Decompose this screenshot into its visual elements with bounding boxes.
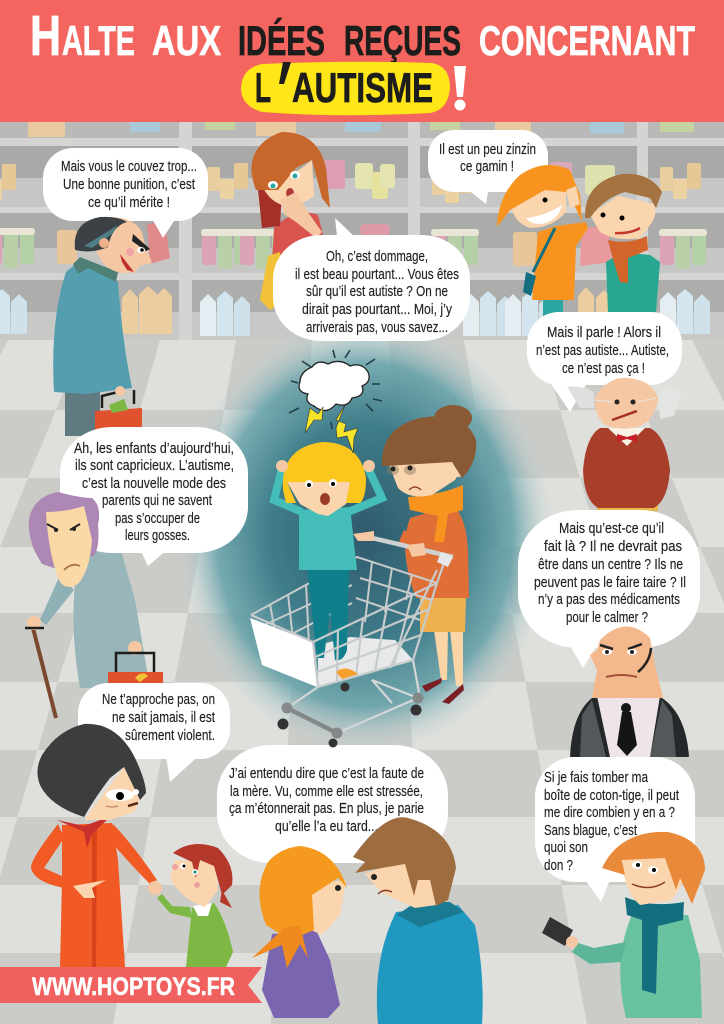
character: angry woman with black hair [31, 724, 233, 967]
shopping basket [95, 386, 142, 430]
speech bubble: pas médicaments: fait là ? Il ne devrait pas [544, 538, 682, 555]
speech bubble: zinzin [428, 130, 548, 204]
character: orange-haired woman from behind [252, 846, 347, 1018]
speech bubble: c'est dommage: il est beau pourtant... Vous êtes [295, 266, 459, 283]
speech bubble: coton-tige: don ? [544, 857, 573, 874]
character: smiling boy with phone [542, 832, 705, 1018]
exclamation mark [454, 66, 466, 110]
speech bubble: il parle: Mais il parle ! Alors il [547, 324, 661, 341]
character: laughing orange-haired boy [497, 165, 588, 316]
speech bubble: zinzin: ce gamin ! [460, 158, 514, 175]
speech bubble: c'est dommage: Oh, c’est dommage, [326, 248, 428, 265]
old lady's head [29, 492, 99, 587]
speech bubble: sûrement violent: sûrement violent. [125, 727, 215, 744]
speech bubble: c'est dommage: sûr qu’il est autiste ? On ne [306, 283, 448, 300]
speech bubble: faute de la mère: qu’elle l’a eu tard... [275, 818, 378, 835]
highlighted word: l'autisme: AUTISME [292, 64, 433, 111]
mother [382, 405, 476, 704]
speech bubble: coton-tige: boîte de coton-tige, il peut [544, 787, 680, 804]
speech bubble: enfants capricieux: ils sont capricieux. L’autisme, [75, 457, 234, 474]
speech bubble: enfants capricieux [60, 427, 248, 566]
title banner [0, 0, 724, 122]
thought cloud with lightning [289, 350, 382, 453]
speech bubble: enfants capricieux: c’est la nouvelle mode des [82, 475, 226, 492]
speech bubble: coton-tige [535, 757, 695, 902]
speech bubble: coton-tige: me dire combien y en a ? [544, 804, 675, 821]
speech bubble: pas médicaments: pour le calmer ? [566, 609, 648, 626]
speech bubble: pas médicaments: être dans un centre ? Ils ne [538, 556, 683, 573]
floor background [0, 340, 724, 1024]
speech bubble: il parle [527, 312, 682, 412]
speech bubble: pas médicaments: n’y a pas des médicaments [538, 591, 680, 608]
title banner: REÇUES [344, 17, 461, 64]
cart back wires and floor [251, 557, 437, 687]
character: red-haired woman gasping [251, 132, 330, 310]
speech bubble: coton-tige: Sans blague, c’est [544, 822, 638, 839]
title banner: AUX [152, 17, 221, 64]
speech bubble: enfants capricieux: parents qui ne savent [102, 492, 213, 509]
website ribbon: WWW.HOPTOYS.FR [32, 973, 235, 1001]
speech bubble: faute de la mère [217, 745, 448, 863]
speech bubble: sûrement violent: ne sait jamais, il est [112, 709, 216, 726]
website ribbon [0, 967, 262, 1003]
speech bubble: pas médicaments: peuvent pas le faire taire ? Il [534, 574, 686, 591]
highlighted word: l'autisme [241, 62, 450, 115]
speech bubble: pas médicaments [518, 510, 700, 668]
character: bald security guard in suit [570, 626, 689, 757]
speech bubble: c'est dommage: dirait pas pourtant... Moi, j’y [302, 301, 452, 318]
speech bubble: couvez trop [43, 148, 208, 238]
speech bubble: c'est dommage: arriverais pas, vous savez... [306, 319, 448, 336]
central scene: blonde child in cart with mother [250, 405, 476, 748]
shop shelves [0, 122, 724, 340]
speech bubble: enfants capricieux: pas s’occuper de [115, 510, 200, 527]
speech bubble: coton-tige: quoi son [544, 839, 588, 856]
speech bubble: coton-tige: Si je fais tomber ma [544, 769, 649, 786]
character: brown-haired man from behind [353, 817, 483, 1024]
speech bubble: faute de la mère: la mère. Vu, comme elle est stressée, [230, 783, 423, 800]
speech bubble: pas médicaments: Mais qu’est-ce qu’il [559, 520, 664, 537]
speech bubble: sûrement violent: Ne t’approche pas, on [102, 691, 215, 708]
speech bubble: c'est dommage [273, 218, 470, 341]
character: old lady's body with cane and basket [25, 525, 163, 718]
speech bubble: couvez trop: Une bonne punition, c’est [63, 176, 196, 193]
character: bald old man with basket [53, 217, 152, 436]
title banner: IDÉES [238, 17, 325, 64]
child's legs [307, 566, 349, 660]
title banner: ALTE [62, 17, 135, 64]
spotlight glow behind central scene [150, 315, 580, 765]
speech bubble: il parle: n’est pas autiste... Autiste, [536, 342, 669, 359]
speech bubble: enfants capricieux: leurs gosses. [125, 527, 190, 544]
child's head and hair [276, 442, 375, 516]
speech bubble: il parle: ce n’est pas ça ! [562, 360, 645, 377]
speech bubble: zinzin: Il est un peu zinzin [439, 141, 536, 158]
title banner: H [30, 4, 61, 68]
old lady's basket [108, 653, 163, 688]
shopping cart front [250, 531, 453, 748]
speech bubble: couvez trop: ce qu’il mérite ! [88, 194, 170, 211]
phone [542, 917, 578, 948]
character: white-haired old man with bow tie [567, 378, 682, 511]
child's shirt and arms [274, 468, 382, 570]
speech bubble: faute de la mère: J’ai entendu dire que c’est la faute de [229, 765, 424, 782]
small red-haired girl [148, 844, 233, 967]
highlighted word: l'autisme: L [255, 64, 271, 111]
character: smirking brown-haired boy [585, 174, 662, 312]
speech bubble: enfants capricieux: Ah, les enfants d’aujourd’hui, [74, 440, 234, 457]
speech bubble: sûrement violent [78, 683, 230, 782]
speech bubble: faute de la mère: ça m’étonnerait pas. En plus, je parie [229, 800, 424, 817]
speech bubble: couvez trop: Mais vous le couvez trop... [61, 158, 197, 175]
